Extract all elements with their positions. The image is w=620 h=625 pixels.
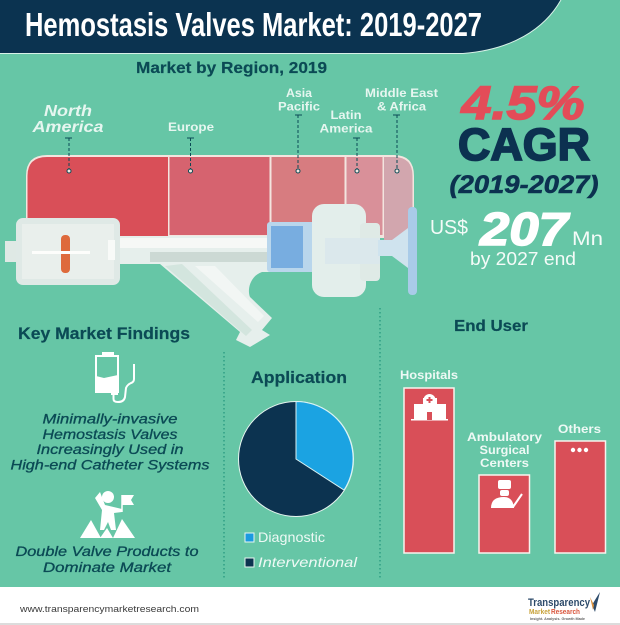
CAGR label: CAGR (458, 119, 590, 170)
panel: region stacked bar (26, 155, 414, 240)
panel: CAGR callout (450, 76, 598, 199)
finding text: catheter systems: Minimally-invasive (42, 412, 178, 426)
label: Middle East and Africa: Middle East (365, 86, 438, 100)
label: Latin America: Latin (330, 108, 362, 122)
heading: key market findings: Key Market Findings (18, 325, 190, 343)
finding text: catheter systems: Hemostasis Valves (42, 427, 178, 442)
icon: ellipsis (571, 448, 588, 452)
title: Hemostasis Valves Market: 2019-2027 (25, 6, 482, 43)
image: hemostasis valve (5, 204, 417, 347)
label: North America (31, 103, 104, 136)
icon: IV drip bag (96, 352, 134, 402)
logo: Transparency Market Research: Research (551, 609, 580, 616)
legend: diagnostic: Diagnostic (258, 529, 325, 545)
label: Latin America: America (320, 122, 373, 136)
bar: ambulatory surgical centers: Surgical (480, 443, 530, 457)
heading: application: Application (251, 369, 347, 387)
finding text: catheter systems: Increasingly Used in (36, 442, 184, 457)
bar: hospitals (400, 368, 458, 553)
legend: interventional: Interventional (258, 554, 358, 570)
bar: ambulatory surgical centers: Ambulatory (467, 430, 542, 444)
pie chart: application (238, 402, 354, 516)
logo: Transparency Market Research: Insight. Analysis. Growth Made (530, 616, 586, 621)
finding text: double valve: Dominate Market (43, 560, 173, 575)
finding text: catheter systems (10, 412, 210, 472)
icon: surgeon (491, 480, 522, 508)
pie slice: diagnostic (296, 402, 353, 490)
label: Asia Pacific: Asia (286, 86, 312, 100)
CAGR period: (2019-2027) (450, 171, 598, 199)
footer (0, 587, 620, 625)
heading: end user: End User (454, 318, 528, 335)
label: Asia Pacific (278, 86, 320, 114)
bar: others (555, 422, 606, 553)
year note: by 2027 end (470, 249, 576, 269)
header banner (0, 0, 562, 54)
finding text: catheter systems: High-end Catheter Systems (10, 458, 210, 472)
logo: Transparency Market Research: Market (529, 609, 551, 616)
label: Middle East and Africa (365, 86, 438, 114)
icon: hospital (411, 394, 448, 420)
bar: hospitals: Hospitals (400, 368, 458, 382)
bar: ambulatory surgical centers: Centers (480, 456, 529, 470)
label: North America: America (31, 119, 104, 136)
label: Europe: Europe (168, 120, 214, 134)
CAGR value: 4.5% (460, 76, 584, 129)
unit: Mn (572, 229, 603, 250)
region labels (31, 86, 438, 136)
website url: www.transparencymarketresearch.com (19, 604, 199, 615)
icon: climber with flag (80, 491, 135, 538)
dotted dividers (224, 308, 380, 578)
label: North America: North (44, 103, 92, 120)
label: Middle East and Africa: & Africa (377, 100, 426, 114)
bar: others: Others (558, 422, 601, 436)
value: 207 (479, 203, 571, 255)
bar: ambulatory surgical centers (467, 430, 542, 553)
finding text: double valve: Double Valve Products to (16, 544, 199, 559)
finding text: double valve (16, 544, 199, 575)
label: Asia Pacific: Pacific (278, 100, 320, 114)
region leader lines (65, 115, 400, 173)
label: Latin America (320, 108, 373, 136)
logo: Transparency Market Research (528, 592, 600, 621)
logo: Transparency Market Research: Transparency (528, 597, 591, 609)
currency: US$ (430, 217, 468, 239)
panel: market value (430, 203, 603, 269)
heading: market by region: Market by Region, 2019 (136, 60, 327, 77)
